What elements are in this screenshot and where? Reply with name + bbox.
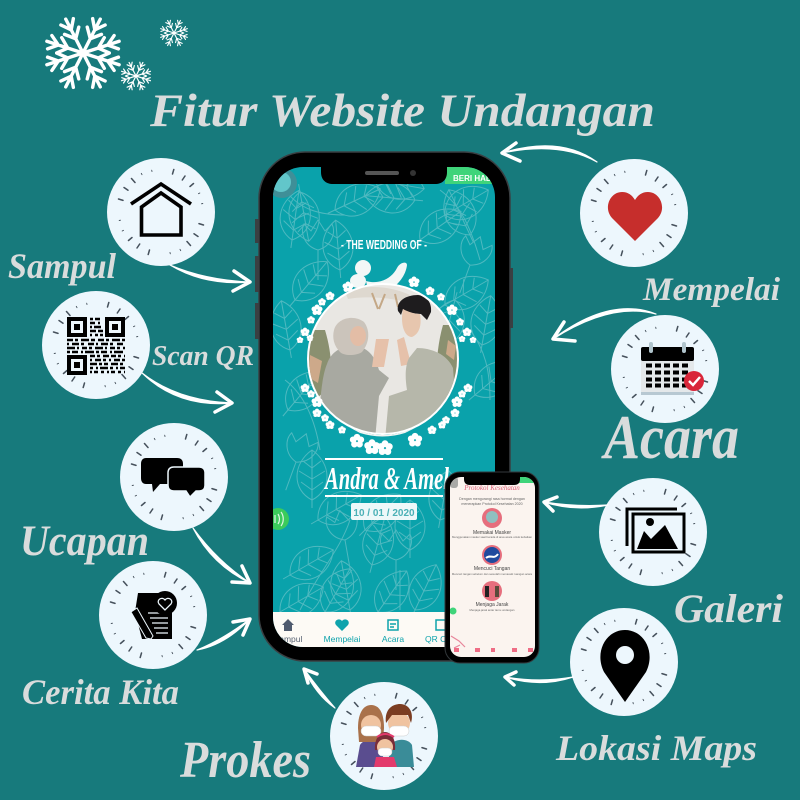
date badge [351, 503, 417, 520]
arrow: sampul [170, 265, 250, 291]
label: acara: Acara [601, 404, 739, 472]
icon: dove [350, 260, 407, 290]
phone: small mockup: Menggunakan masker saat berada di area acara untuk kebaikan [452, 535, 532, 539]
feature: sampul [107, 158, 215, 266]
man [386, 348, 454, 433]
feature: lokasi maps [570, 608, 678, 716]
leaf pattern [273, 184, 495, 612]
label: mempelai: Mempelai [642, 272, 781, 308]
button: sound [273, 508, 289, 530]
protocol: mencuci tangan [474, 545, 510, 572]
phone screen [273, 167, 495, 647]
arrow: prokes [304, 669, 335, 708]
bottom navigation [273, 612, 444, 647]
arrow: scan qr [142, 373, 232, 412]
protocol: menjaga jarak [476, 581, 509, 608]
feature: prokes [330, 682, 438, 790]
phone: small mockup: Protokol Kesehatan [463, 484, 520, 492]
feature: galeri [599, 478, 707, 586]
button: top left [273, 170, 297, 198]
protocol: menjaga jarak: Menjaga Jarak [476, 602, 509, 608]
label: prokes: Prokes [179, 732, 311, 789]
icon: map pin [600, 630, 650, 702]
flower wreath [297, 276, 476, 455]
phone: small mockup: Mencuci tangan sebelum dan sesudah memasuki ruangan acara [452, 572, 533, 576]
bottom navigation: Mempelai [324, 634, 361, 644]
icon: pictures [627, 509, 684, 552]
feature: acara [611, 315, 719, 423]
phone body [259, 152, 510, 661]
protocol: mencuci tangan: Mencuci Tangan [474, 566, 510, 572]
arrow: ucapan [193, 528, 250, 583]
arrow: galeri [544, 497, 608, 511]
feature: scan qr [42, 291, 150, 399]
bottom navigation: QR Code [425, 634, 461, 644]
arrow: cerita kita [197, 619, 250, 650]
icon: chat bubbles [141, 458, 205, 497]
icon: heart [608, 192, 662, 241]
protocol: memakai masker: Memakai Masker [473, 530, 511, 536]
date badge: 10 / 01 / 2020 [353, 508, 415, 519]
icon: story notes [131, 591, 177, 639]
heading: the wedding of: - THE WEDDING OF - [341, 237, 427, 252]
icon: family with masks [356, 704, 414, 767]
label: cerita kita: Cerita Kita [22, 672, 179, 712]
names: andra and amel: Andra & Amel [324, 460, 449, 496]
feature: mempelai [580, 159, 688, 267]
phone side buttons [255, 219, 513, 339]
title: Fitur Website Undangan [149, 85, 655, 137]
woman [320, 348, 389, 433]
feature: ucapan [120, 423, 228, 531]
arrow: lokasi maps [505, 672, 573, 685]
names: andra and amel [324, 459, 449, 496]
phone: small mockup: menerapkan Protokol Kesehatan 2020 [461, 502, 523, 506]
icon: calendar [641, 342, 704, 395]
phone: main mockup [255, 152, 523, 661]
icon: qr code [67, 317, 125, 375]
icon: house [131, 184, 191, 235]
label: ucapan: Ucapan [20, 518, 149, 565]
button: beri hadiah: BERI HADIAH [453, 174, 506, 183]
bottom navigation: Sampul [274, 634, 303, 644]
photo frame: couple [297, 276, 476, 455]
notch [321, 166, 447, 184]
phone: small mockup [445, 472, 539, 663]
feature: cerita kita [99, 561, 207, 669]
label: sampul: Sampul [8, 246, 116, 286]
hands [372, 337, 411, 367]
label: scan qr: Scan QR [152, 340, 254, 372]
label: galeri: Galeri [674, 586, 783, 631]
protocol: memakai masker [473, 508, 511, 536]
button: beri hadiah [445, 167, 492, 184]
phone: small mockup: Menjaga jarak antar tamu undangan [470, 608, 515, 612]
bottom navigation: Acara [382, 634, 404, 644]
label: lokasi maps: Lokasi Maps [555, 728, 757, 768]
icon: snowflakes [44, 16, 188, 91]
arrow: acara [553, 309, 656, 341]
phone: small mockup: Dengan mengurangi rasa hormat dengan [459, 497, 525, 501]
arrow: mempelai [502, 143, 597, 162]
